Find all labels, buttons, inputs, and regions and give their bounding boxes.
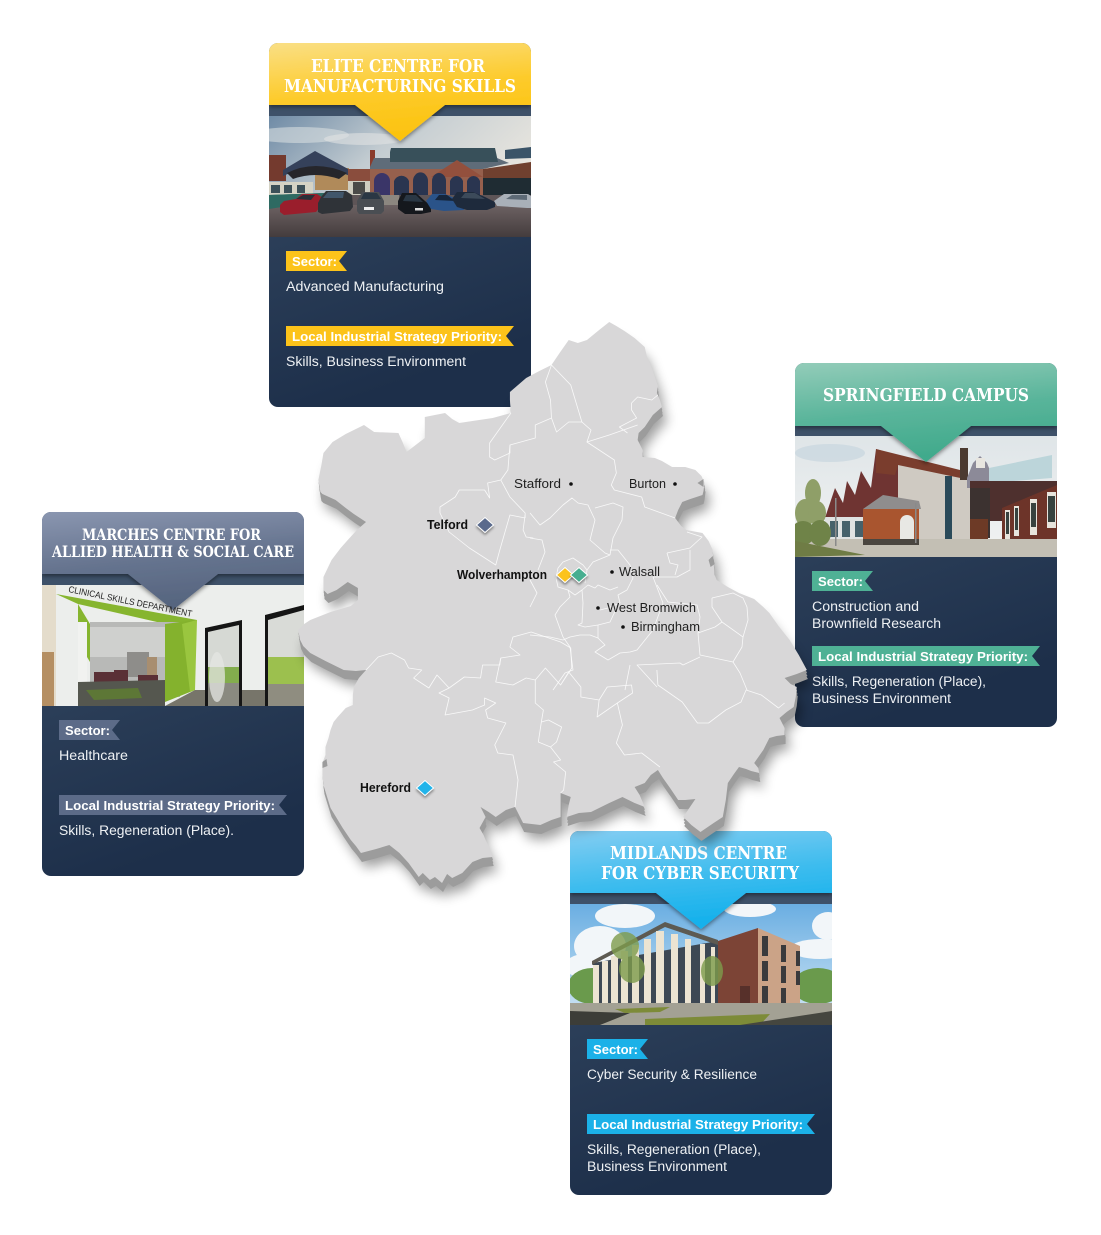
sector value: Construction and (812, 599, 919, 614)
priority value: Skills, Regeneration (Place), (587, 1142, 761, 1157)
priority ribbon (59, 795, 287, 815)
priority ribbon: Local Industrial Strategy Priority: (593, 1117, 803, 1132)
city marker: West Bromwich: West Bromwich (607, 601, 696, 615)
sector ribbon: Sector: (593, 1042, 638, 1057)
card title: ALLIED HEALTH & SOCIAL CARE (51, 542, 294, 561)
card title: MANUFACTURING SKILLS (284, 76, 516, 97)
city marker: Burton: Burton (629, 477, 666, 491)
city marker: Wolverhampton (457, 568, 588, 582)
card title (51, 525, 294, 561)
city marker: Telford (427, 518, 494, 532)
card: Marches Centre for Allied Health and Social Care (42, 512, 304, 876)
priority ribbon: Local Industrial Strategy Priority: (818, 649, 1028, 664)
central district boundaries (530, 498, 748, 690)
city marker: Walsall: Walsall (619, 565, 660, 579)
sector ribbon: Sector: (65, 723, 110, 738)
header with pointer (269, 43, 531, 141)
card title: MARCHES CENTRE FOR (82, 525, 261, 544)
card: Springfield Campus (791, 363, 1057, 727)
card title (601, 843, 800, 884)
priority value (812, 674, 986, 706)
sector value: Advanced Manufacturing (286, 279, 444, 294)
photo: Elite Centre building with cars (249, 116, 531, 237)
card: Elite Centre for Manufacturing Skills (249, 43, 531, 407)
priority value: Business Environment (587, 1159, 727, 1174)
band under header (327, 105, 531, 116)
priority value: Skills, Business Environment (286, 354, 466, 369)
priority value: Skills, Regeneration (Place), (812, 674, 986, 689)
priority ribbon: Local Industrial Strategy Priority: (65, 798, 275, 813)
city marker: Hereford: Hereford (360, 781, 411, 795)
priority ribbon: Local Industrial Strategy Priority: (292, 329, 502, 344)
priority value (587, 1142, 761, 1174)
sector value: Cyber Security & Resilience (587, 1067, 757, 1082)
sector ribbon: Sector: (292, 254, 337, 269)
sector value (812, 599, 941, 631)
city marker: Hereford (360, 780, 434, 796)
card title: MIDLANDS CENTRE (610, 843, 787, 864)
priority ribbon (812, 646, 1040, 666)
sector ribbon (286, 251, 347, 271)
priority ribbon (587, 1114, 815, 1134)
card title: ELITE CENTRE FOR (311, 56, 486, 77)
signage text: CLINICAL SKILLS DEPARTMENT (68, 584, 194, 619)
sector ribbon (59, 720, 120, 740)
sector ribbon (812, 571, 873, 591)
header with pointer (42, 512, 304, 610)
photo: Springfield Campus buildings (791, 436, 1057, 557)
city marker: Stafford: Stafford (514, 477, 561, 491)
city marker: Birmingham: Birmingham (631, 620, 700, 634)
photo: cyber security building render (570, 904, 832, 1025)
map of the West Midlands (298, 322, 812, 898)
sector value: Healthcare (59, 748, 128, 763)
priority ribbon (286, 326, 514, 346)
cars (280, 191, 531, 215)
sector value: Brownfield Research (812, 616, 941, 631)
card title (284, 56, 516, 97)
card title: FOR CYBER SECURITY (601, 863, 800, 884)
city marker: Wolverhampton: Wolverhampton (457, 568, 547, 582)
sector ribbon (587, 1039, 648, 1059)
header with pointer (795, 363, 1057, 462)
priority value: Business Environment (812, 691, 951, 706)
card title: SPRINGFIELD CAMPUS (823, 385, 1029, 406)
priority value: Skills, Regeneration (Place). (59, 823, 234, 838)
city marker: Telford: Telford (427, 518, 468, 532)
photo: clinical skills department interior (42, 585, 304, 706)
card: Midlands Centre for Cyber Security (565, 831, 850, 1195)
sector ribbon: Sector: (818, 574, 863, 589)
header with pointer (570, 831, 832, 929)
